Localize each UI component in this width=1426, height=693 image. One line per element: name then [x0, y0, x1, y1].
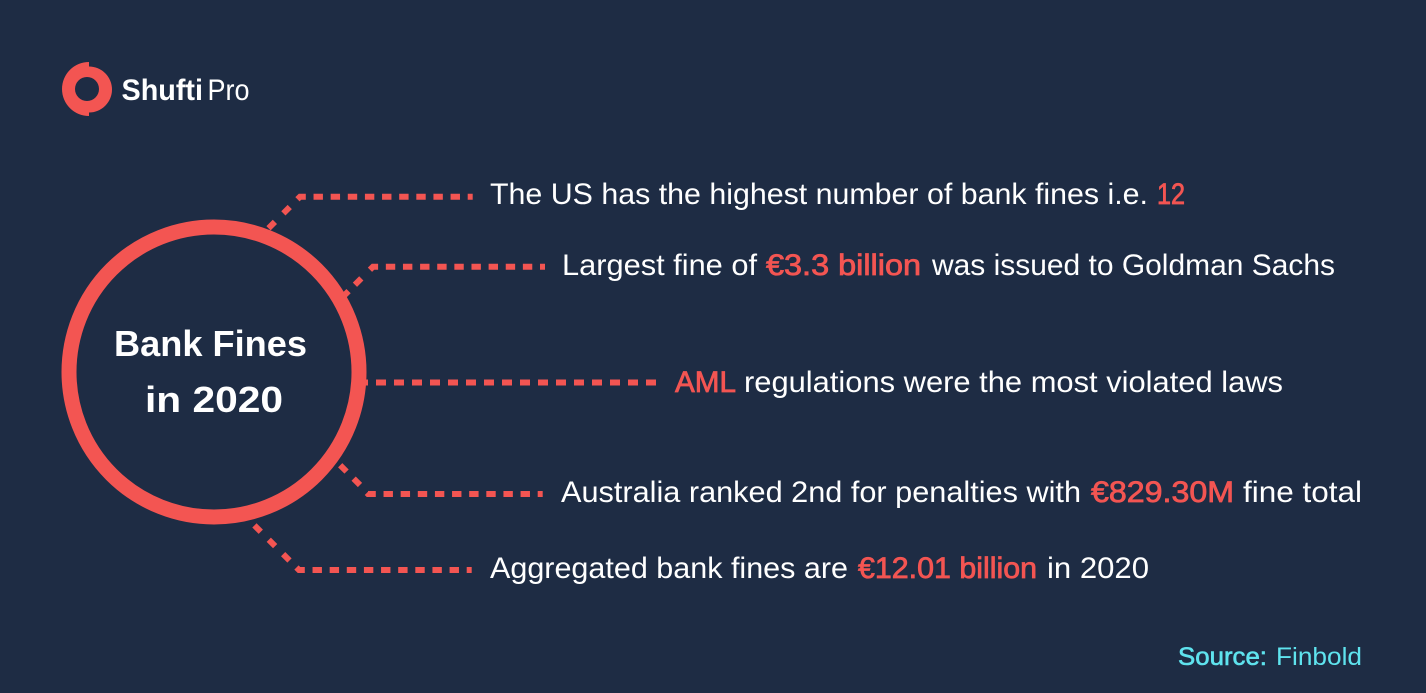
- fact 1: The US has the highest number of bank fines i.e.: [490, 178, 1148, 211]
- heading: Bank Fines in 2020: in 2020: [145, 379, 283, 420]
- fact 4: €829.30M: [1091, 476, 1234, 509]
- connector 1: [268, 197, 473, 229]
- connector 3: [360, 380, 656, 386]
- fact 4: Australia ranked 2nd for penalties with: [561, 476, 1081, 509]
- connector 5: [254, 525, 472, 570]
- logo wordmark: Pro: Pro: [208, 74, 250, 107]
- source: Source:: [1178, 643, 1267, 671]
- fact 5: €12.01 billion: [858, 552, 1037, 585]
- fact 5: in 2020: [1047, 552, 1149, 585]
- source: [1178, 643, 1362, 671]
- logo: Shufti Pro: [62, 62, 250, 116]
- source: Finbold: [1276, 643, 1362, 671]
- central circle: [69, 227, 359, 517]
- fact 5: [490, 552, 1149, 585]
- fact 2: €3.3 billion: [766, 249, 921, 282]
- fact 5: Aggregated bank fines are: [490, 552, 848, 585]
- fact 3: regulations were the most violated laws: [744, 366, 1283, 399]
- heading: Bank Fines in 2020: Bank Fines: [114, 323, 307, 364]
- icon: logo ring: [62, 62, 112, 116]
- heading: Bank Fines in 2020: [114, 323, 307, 420]
- fact 1: 12: [1157, 178, 1185, 211]
- fact 3: AML: [675, 366, 736, 399]
- connector 4: [338, 463, 543, 494]
- fact 2: Largest fine of: [562, 249, 758, 282]
- fact 4: fine total: [1243, 476, 1362, 509]
- fact 2: [562, 249, 1335, 282]
- fact 4: [561, 476, 1362, 509]
- logo wordmark: Shufti: Shufti: [122, 74, 203, 107]
- fact 2: was issued to Goldman Sachs: [931, 249, 1335, 282]
- connector 2: [342, 267, 545, 298]
